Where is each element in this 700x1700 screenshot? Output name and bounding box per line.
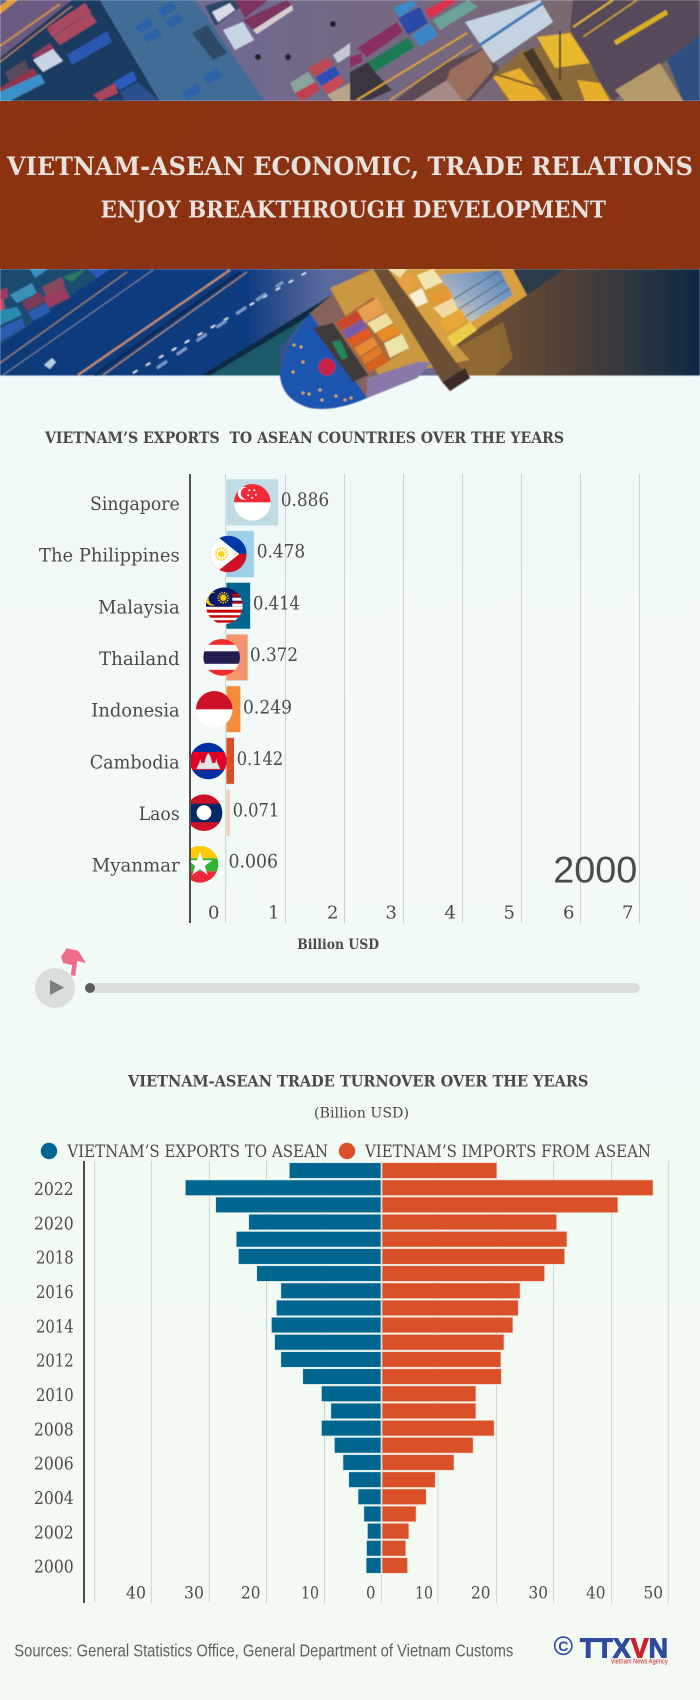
year labels: 2016 (36, 1283, 74, 1303)
axis line (189, 474, 191, 923)
value labels: 0.414 (253, 592, 300, 614)
gridlines (95, 1161, 668, 1603)
value labels: 0.478 (257, 541, 305, 563)
country labels: Thailand (99, 648, 180, 670)
x axis tick labels: 2 (327, 902, 338, 923)
flag: Cambodia (189, 742, 227, 780)
year labels: 2002 (34, 1523, 74, 1543)
country labels: Singapore (90, 493, 180, 515)
year labels: 2022 (34, 1180, 74, 1200)
axis line (83, 1161, 85, 1603)
x axis tick labels (208, 902, 634, 923)
legend (41, 1142, 651, 1161)
value axis labels: 10 (301, 1583, 319, 1603)
axis title: Billion USD (297, 937, 379, 953)
flag: Indonesia (195, 690, 233, 728)
value axis labels: 20 (471, 1583, 490, 1603)
year labels: 2018 (36, 1249, 74, 1269)
country labels: The Philippines (39, 545, 180, 567)
slider knob (85, 983, 95, 993)
value labels: 0.372 (250, 644, 298, 666)
value labels: 0.886 (281, 489, 329, 511)
value axis labels (126, 1583, 663, 1603)
value axis labels: 40 (586, 1583, 606, 1603)
legend: VIETNAM’S IMPORTS FROM ASEAN (364, 1142, 651, 1161)
country labels: Indonesia (91, 700, 180, 722)
year labels: 2014 (36, 1317, 74, 1337)
photo bottom: road, water and ship (0, 269, 700, 409)
flag: Malaysia (205, 587, 243, 625)
icon: play button (35, 968, 75, 1008)
country labels: Myanmar (92, 855, 181, 877)
bars (226, 479, 278, 888)
year labels: 2020 (34, 1214, 74, 1234)
photo top: container yard (0, 0, 700, 101)
value axis labels: 30 (184, 1583, 204, 1603)
x axis tick labels: 7 (622, 902, 634, 923)
value axis labels: 10 (415, 1583, 433, 1603)
year labels: 2010 (36, 1386, 74, 1406)
country labels: Malaysia (98, 596, 180, 618)
gridlines (226, 474, 640, 923)
x axis tick labels: 4 (445, 902, 456, 923)
chart unit: (Billion USD) (314, 1106, 409, 1122)
ship hull and deck (280, 269, 565, 409)
legend: VIETNAM’S EXPORTS TO ASEAN (66, 1142, 328, 1161)
heading: trade turnover chart (127, 1072, 588, 1122)
logo: TTXVN: C (558, 1638, 568, 1654)
flags (191, 484, 271, 883)
value labels (228, 489, 329, 873)
logo: TTXVN: TTXVN (580, 1632, 668, 1663)
flag: Singapore (233, 483, 271, 521)
flag: Laos (191, 794, 222, 831)
year labels: 2006 (34, 1455, 74, 1475)
timeline player (35, 948, 640, 1008)
country labels: Cambodia (90, 751, 180, 773)
year labels: 2008 (34, 1420, 74, 1440)
value axis labels: 50 (644, 1583, 663, 1603)
import bars (382, 1163, 653, 1573)
value labels: 0.071 (233, 800, 279, 822)
year labels: 2012 (36, 1352, 74, 1372)
x axis tick labels: 5 (504, 902, 515, 923)
title line 2: ENJOY BREAKTHROUGH DEVELOPMENT (100, 196, 606, 223)
butterfly chart: exports and imports by year (34, 1161, 668, 1603)
value axis labels: 20 (241, 1583, 260, 1603)
hero photo: container port and ship (0, 0, 700, 409)
value axis labels: 0 (366, 1583, 376, 1603)
x axis tick labels: 0 (208, 902, 220, 923)
flag: Thailand (203, 638, 241, 676)
icon: pointing hand (61, 948, 86, 976)
value labels: 0.249 (243, 696, 292, 718)
year labels: 2004 (34, 1489, 74, 1509)
x axis tick labels: 3 (386, 902, 397, 923)
slider track (90, 983, 640, 993)
flag: Philippines (209, 535, 247, 573)
x axis tick labels: 6 (563, 902, 574, 923)
chart title: VIETNAM-ASEAN TRADE TURNOVER OVER THE YEARS (127, 1072, 588, 1091)
country labels (39, 493, 181, 877)
export bars (185, 1163, 381, 1573)
flag: Myanmar (191, 846, 218, 883)
value axis labels: 30 (528, 1583, 548, 1603)
year labels: 2000 (34, 1558, 74, 1578)
value axis labels: 40 (126, 1583, 146, 1603)
logo: TTXVN: Vietnam News Agency (611, 1658, 668, 1665)
heading: exports chart: VIETNAM’S EXPORTS TO ASEAN COUNTRIES OVER THE YEARS (44, 428, 564, 447)
bar chart: Vietnam's exports by country (39, 474, 640, 953)
title band (0, 101, 700, 269)
country labels: Laos (139, 803, 180, 825)
value labels: 0.006 (228, 851, 278, 873)
source note: Sources: General Statistics Office, General Department of Vietnam Customs (14, 1641, 514, 1661)
value labels: 0.142 (237, 748, 283, 770)
year labels (34, 1180, 74, 1578)
x axis tick labels: 1 (268, 902, 280, 923)
year counter: 2000 (553, 849, 637, 891)
